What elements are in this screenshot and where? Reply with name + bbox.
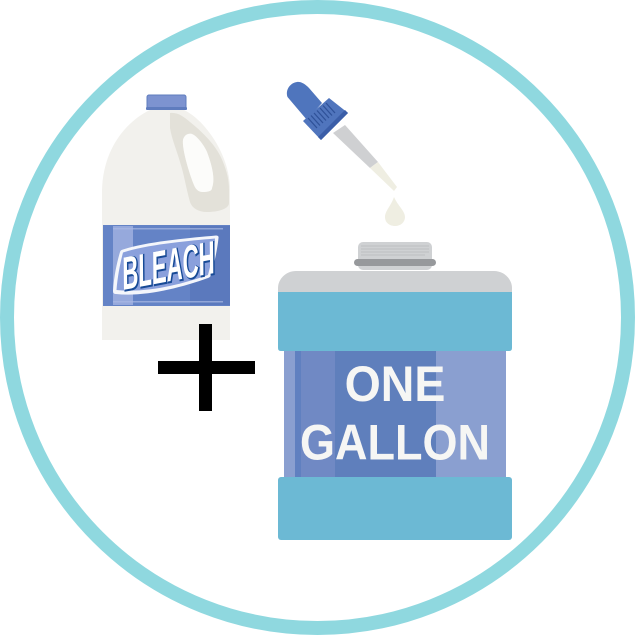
bleach wordmark: BLEACH: [123, 232, 216, 301]
one gallon text: [300, 356, 490, 471]
dropper collar: [303, 98, 348, 140]
jug middle panel: [284, 350, 506, 478]
dropper tube: [333, 125, 378, 168]
jug top band: [278, 292, 512, 351]
icon: dropper: [287, 82, 405, 226]
one gallon text: GALLON: [300, 415, 490, 471]
bottle body: [102, 110, 230, 340]
bottle handle: [170, 113, 229, 212]
jug bottom band: [278, 477, 512, 540]
jug cap: [354, 242, 436, 270]
icon: bleach bottle: [102, 95, 230, 340]
dropper tip with bleach: [370, 162, 397, 191]
label badge: [113, 236, 219, 295]
bleach drop: [385, 197, 405, 226]
one gallon text: ONE: [345, 356, 445, 412]
plus sign: [158, 324, 255, 411]
dropper bulb: [287, 82, 322, 120]
icon: one gallon jug: [278, 242, 512, 540]
bottle cap: [146, 95, 187, 110]
jug shoulder: [278, 271, 512, 293]
bottle handle opening: [183, 134, 213, 192]
bleach wordmark: BLEACH: [122, 231, 215, 300]
bottle label: [103, 225, 230, 306]
